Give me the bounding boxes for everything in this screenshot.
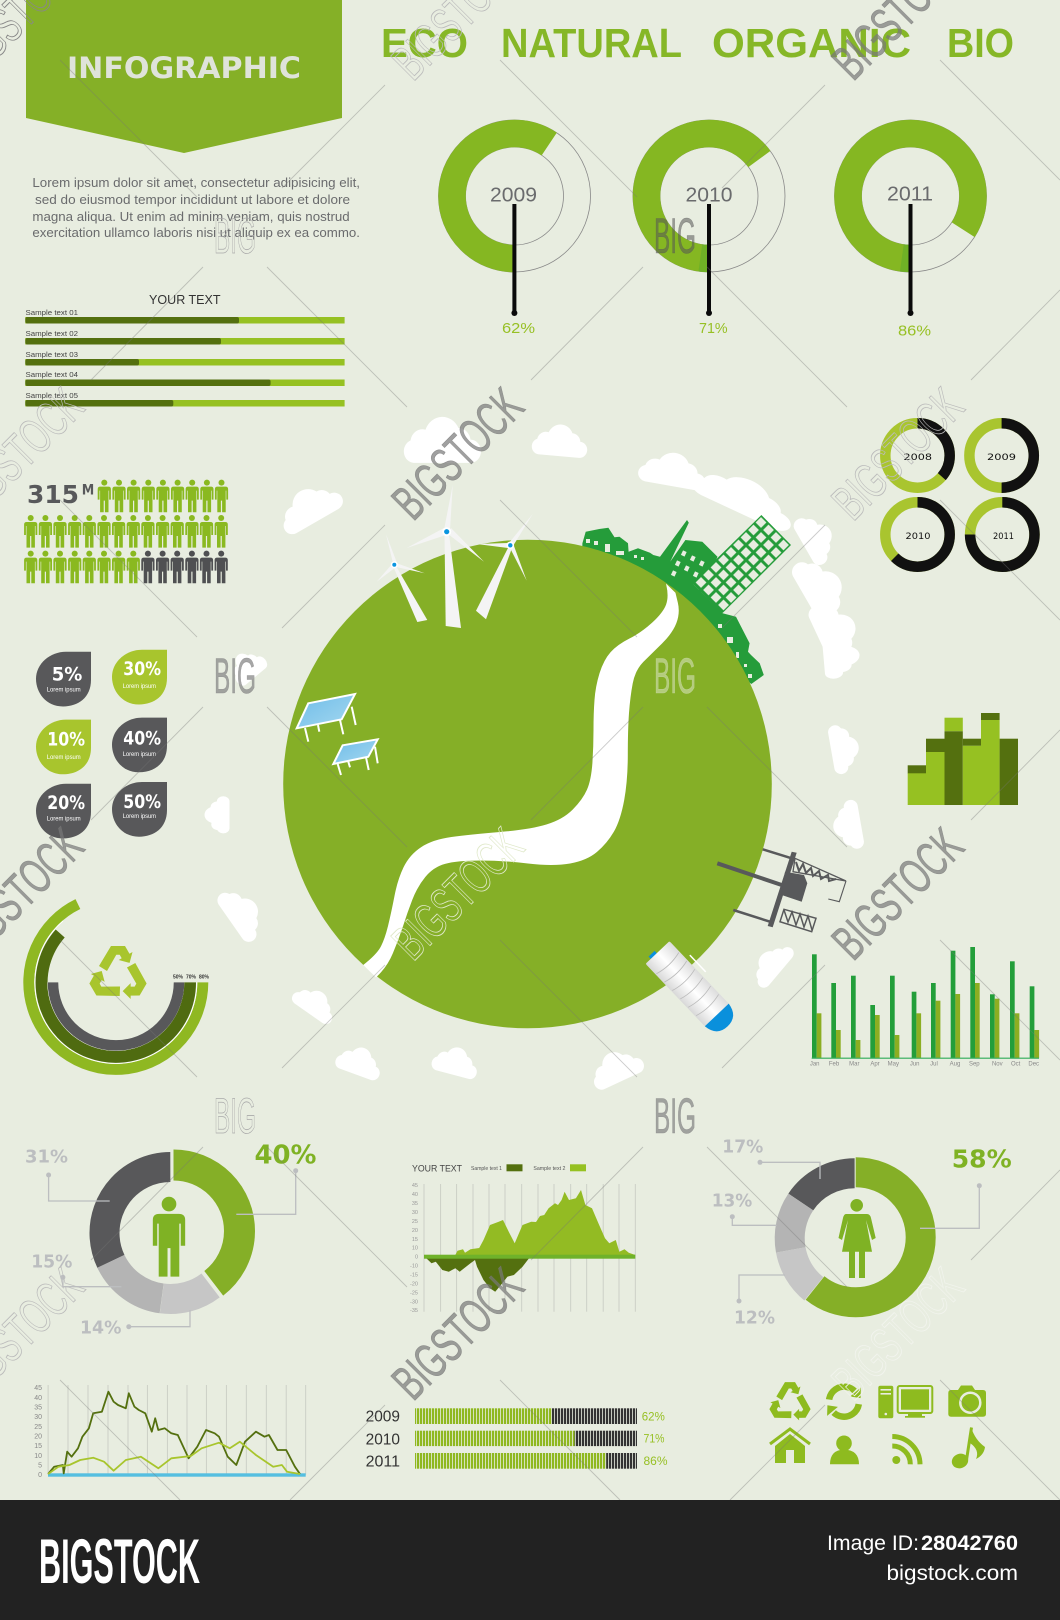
title words: BIO	[947, 20, 1014, 66]
percentage drop badges: Lorem ipsum	[47, 686, 81, 693]
area chart	[410, 1164, 635, 1314]
line chart: 10	[34, 1453, 42, 1460]
title words	[381, 20, 1014, 66]
line chart: 30	[34, 1414, 42, 1421]
footer bar: BIGSTOCK	[39, 1527, 200, 1597]
stacked step chart	[908, 713, 1018, 805]
oil rig	[717, 849, 846, 932]
small year donuts: 2010	[906, 532, 931, 542]
header banner: INFOGRAPHIC	[67, 51, 301, 85]
horizontal progress bars: Sample text 01	[26, 308, 78, 317]
percentage drop badges: 5%	[52, 664, 82, 685]
semicircular ring chart with recycle icon: 50%	[173, 974, 184, 980]
horizontal progress bars: Sample text 04	[26, 370, 78, 379]
monthly grouped bar chart: Dec	[1028, 1062, 1039, 1068]
male donut chart: 14%	[80, 1318, 121, 1338]
watermark BIGSTOCK marks: BIGSTOCK	[381, 377, 534, 530]
donut 2010: 2010	[686, 185, 732, 207]
percentage drop badges: Lorem ipsum	[123, 751, 156, 758]
percentage drop badges: 50%	[123, 792, 161, 813]
female donut chart: 13%	[712, 1192, 752, 1212]
text: BIG	[654, 648, 696, 704]
area chart: YOUR TEXT	[412, 1164, 462, 1175]
monthly grouped bar chart: Jan	[810, 1062, 820, 1068]
intro text block	[32, 175, 360, 240]
area chart: 15	[412, 1237, 418, 1243]
monthly grouped bar chart	[810, 947, 1039, 1068]
striped year bars: 2011	[366, 1454, 400, 1471]
watermark BIG marks: BIG	[214, 208, 256, 264]
area chart: -10	[410, 1264, 418, 1270]
monthly grouped bar chart: Mar	[849, 1062, 859, 1068]
donut 2010	[633, 120, 785, 337]
title words: ECO	[381, 20, 468, 66]
donut 2011: 2011	[887, 184, 933, 206]
percentage drop badges	[36, 650, 167, 838]
monthly grouped bar chart: May	[888, 1062, 899, 1068]
watermark BIGSTOCK marks: BIGSTOCK	[381, 1257, 534, 1410]
area chart: Sample text 2	[533, 1166, 565, 1172]
area chart: -30	[410, 1300, 418, 1306]
horizontal progress bars: Sample text 02	[26, 329, 78, 338]
watermark BIGSTOCK marks: BIGSTOCK	[821, 377, 974, 530]
intro text block: sed do eiusmod tempor incididunt ut labore et dolore	[35, 192, 350, 207]
monthly grouped bar chart: Oct	[1011, 1062, 1021, 1068]
female donut chart: 17%	[722, 1138, 763, 1158]
striped year bars: 71%	[644, 1432, 665, 1446]
line chart: 25	[34, 1424, 42, 1431]
river	[364, 585, 678, 977]
people count pictogram	[24, 480, 228, 583]
striped year bars: 86%	[644, 1454, 668, 1468]
donut 2011	[834, 120, 986, 340]
watermark BIGSTOCK marks: BIGSTOCK	[821, 817, 974, 970]
footer bar: Image ID:	[827, 1532, 919, 1555]
percentage drop badges: 30%	[123, 659, 161, 680]
semicircular ring chart with recycle icon: 80%	[199, 974, 210, 980]
watermark BIGSTOCK marks	[0, 0, 974, 1410]
female donut chart: 58%	[952, 1144, 1012, 1173]
watermark BIG marks: BIG	[214, 648, 256, 704]
area chart: 20	[412, 1228, 418, 1234]
percentage drop badges: 10%	[47, 730, 85, 751]
area chart: -25	[410, 1291, 418, 1297]
percentage drop badges: 20%	[47, 793, 85, 814]
intro text block: exercitation ullamco laboris nisi ut aliquip ex ea commo.	[32, 225, 360, 240]
area chart: 0	[415, 1255, 418, 1261]
text: BIG	[654, 1088, 696, 1144]
footer bar	[0, 1500, 1060, 1620]
area chart: 30	[412, 1210, 418, 1216]
people count pictogram: 315	[27, 480, 79, 509]
monthly grouped bar chart: Nov	[992, 1062, 1003, 1068]
donut 2009: 62%	[502, 320, 535, 337]
area chart: 40	[412, 1192, 418, 1198]
wind turbines	[377, 485, 533, 628]
area chart: 35	[412, 1201, 418, 1207]
line chart: 20	[34, 1434, 42, 1440]
sky clouds	[205, 417, 865, 1092]
area chart: 10	[412, 1246, 418, 1252]
watermark BIGSTOCK marks: BIGSTOCK	[821, 1257, 974, 1410]
percentage drop badges: Lorem ipsum	[123, 683, 156, 690]
people count pictogram: M	[82, 483, 94, 499]
horizontal progress bars: Sample text 03	[26, 350, 78, 359]
monthly grouped bar chart: Aug	[950, 1062, 960, 1068]
striped year bars: 2010	[366, 1431, 400, 1448]
line chart: 5	[38, 1462, 42, 1470]
solar panels	[297, 694, 378, 775]
small year donuts: 2009	[987, 453, 1016, 463]
green city skyline	[582, 515, 791, 684]
monthly grouped bar chart: Sep	[969, 1062, 980, 1068]
male donut chart	[25, 1140, 316, 1338]
semicircular ring chart with recycle icon	[29, 904, 210, 1069]
icon set	[767, 1382, 986, 1471]
percentage drop badges: Lorem ipsum	[47, 815, 81, 822]
watermark BIG marks: BIG	[214, 1088, 256, 1144]
line chart: 45	[34, 1385, 42, 1392]
percentage drop badges: 40%	[123, 728, 161, 750]
header banner	[26, 0, 342, 153]
water bottle	[643, 935, 743, 1038]
semicircular ring chart with recycle icon: 70%	[186, 974, 197, 980]
donut 2010: 71%	[699, 320, 728, 337]
line chart: 0	[38, 1472, 42, 1479]
small year donuts	[885, 423, 1034, 567]
striped year bars	[366, 1408, 668, 1471]
intro text block: magna aliqua. Ut enim ad minim veniam, quis nostrud	[32, 209, 350, 224]
line chart: 35	[34, 1404, 42, 1412]
female donut chart: 12%	[734, 1308, 775, 1328]
donut 2009: 2009	[490, 185, 537, 207]
footer bar: bigstock.com	[886, 1562, 1018, 1585]
monthly grouped bar chart: Feb	[829, 1062, 840, 1068]
line chart: 40	[34, 1395, 42, 1402]
male donut chart: 15%	[31, 1253, 72, 1273]
line chart: 15	[34, 1443, 42, 1450]
area chart: -20	[410, 1282, 418, 1288]
text: BIG	[654, 208, 696, 264]
small year donuts: 2008	[904, 453, 932, 463]
donut 2009	[438, 120, 590, 337]
footer bar: 28042760	[921, 1532, 1018, 1555]
area chart: 45	[412, 1183, 418, 1189]
title words: NATURAL	[501, 20, 682, 66]
male donut chart: 40%	[254, 1140, 316, 1170]
watermark BIG marks	[214, 208, 696, 1144]
percentage drop badges: Lorem ipsum	[47, 754, 81, 761]
female donut chart	[712, 1138, 1012, 1330]
horizontal progress bars: Sample text 05	[26, 391, 78, 400]
small year donuts: 2011	[993, 532, 1014, 542]
donut 2011: 86%	[898, 323, 931, 340]
area chart: -35	[410, 1308, 418, 1314]
monthly grouped bar chart: Jul	[930, 1062, 938, 1068]
area chart: 25	[412, 1219, 418, 1225]
male donut chart: 31%	[25, 1148, 68, 1168]
percentage drop badges: Lorem ipsum	[123, 813, 156, 820]
area chart: Sample text 1	[471, 1166, 502, 1172]
factory smoke clouds	[637, 447, 868, 679]
striped year bars: 62%	[642, 1410, 665, 1424]
intro text block: Lorem ipsum dolor sit amet, consectetur adipisicing elit,	[32, 175, 360, 190]
watermark BIGSTOCK marks: BIGSTOCK	[381, 817, 534, 970]
title words: ORGANIC	[712, 20, 911, 66]
horizontal progress bars	[25, 292, 345, 406]
globe	[283, 540, 772, 1028]
monthly grouped bar chart: Jun	[910, 1062, 920, 1068]
area chart: -15	[410, 1273, 418, 1279]
monthly grouped bar chart: Apr	[870, 1062, 880, 1068]
line chart	[34, 1385, 306, 1479]
horizontal progress bars: YOUR TEXT	[149, 292, 221, 307]
striped year bars: 2009	[366, 1409, 400, 1426]
